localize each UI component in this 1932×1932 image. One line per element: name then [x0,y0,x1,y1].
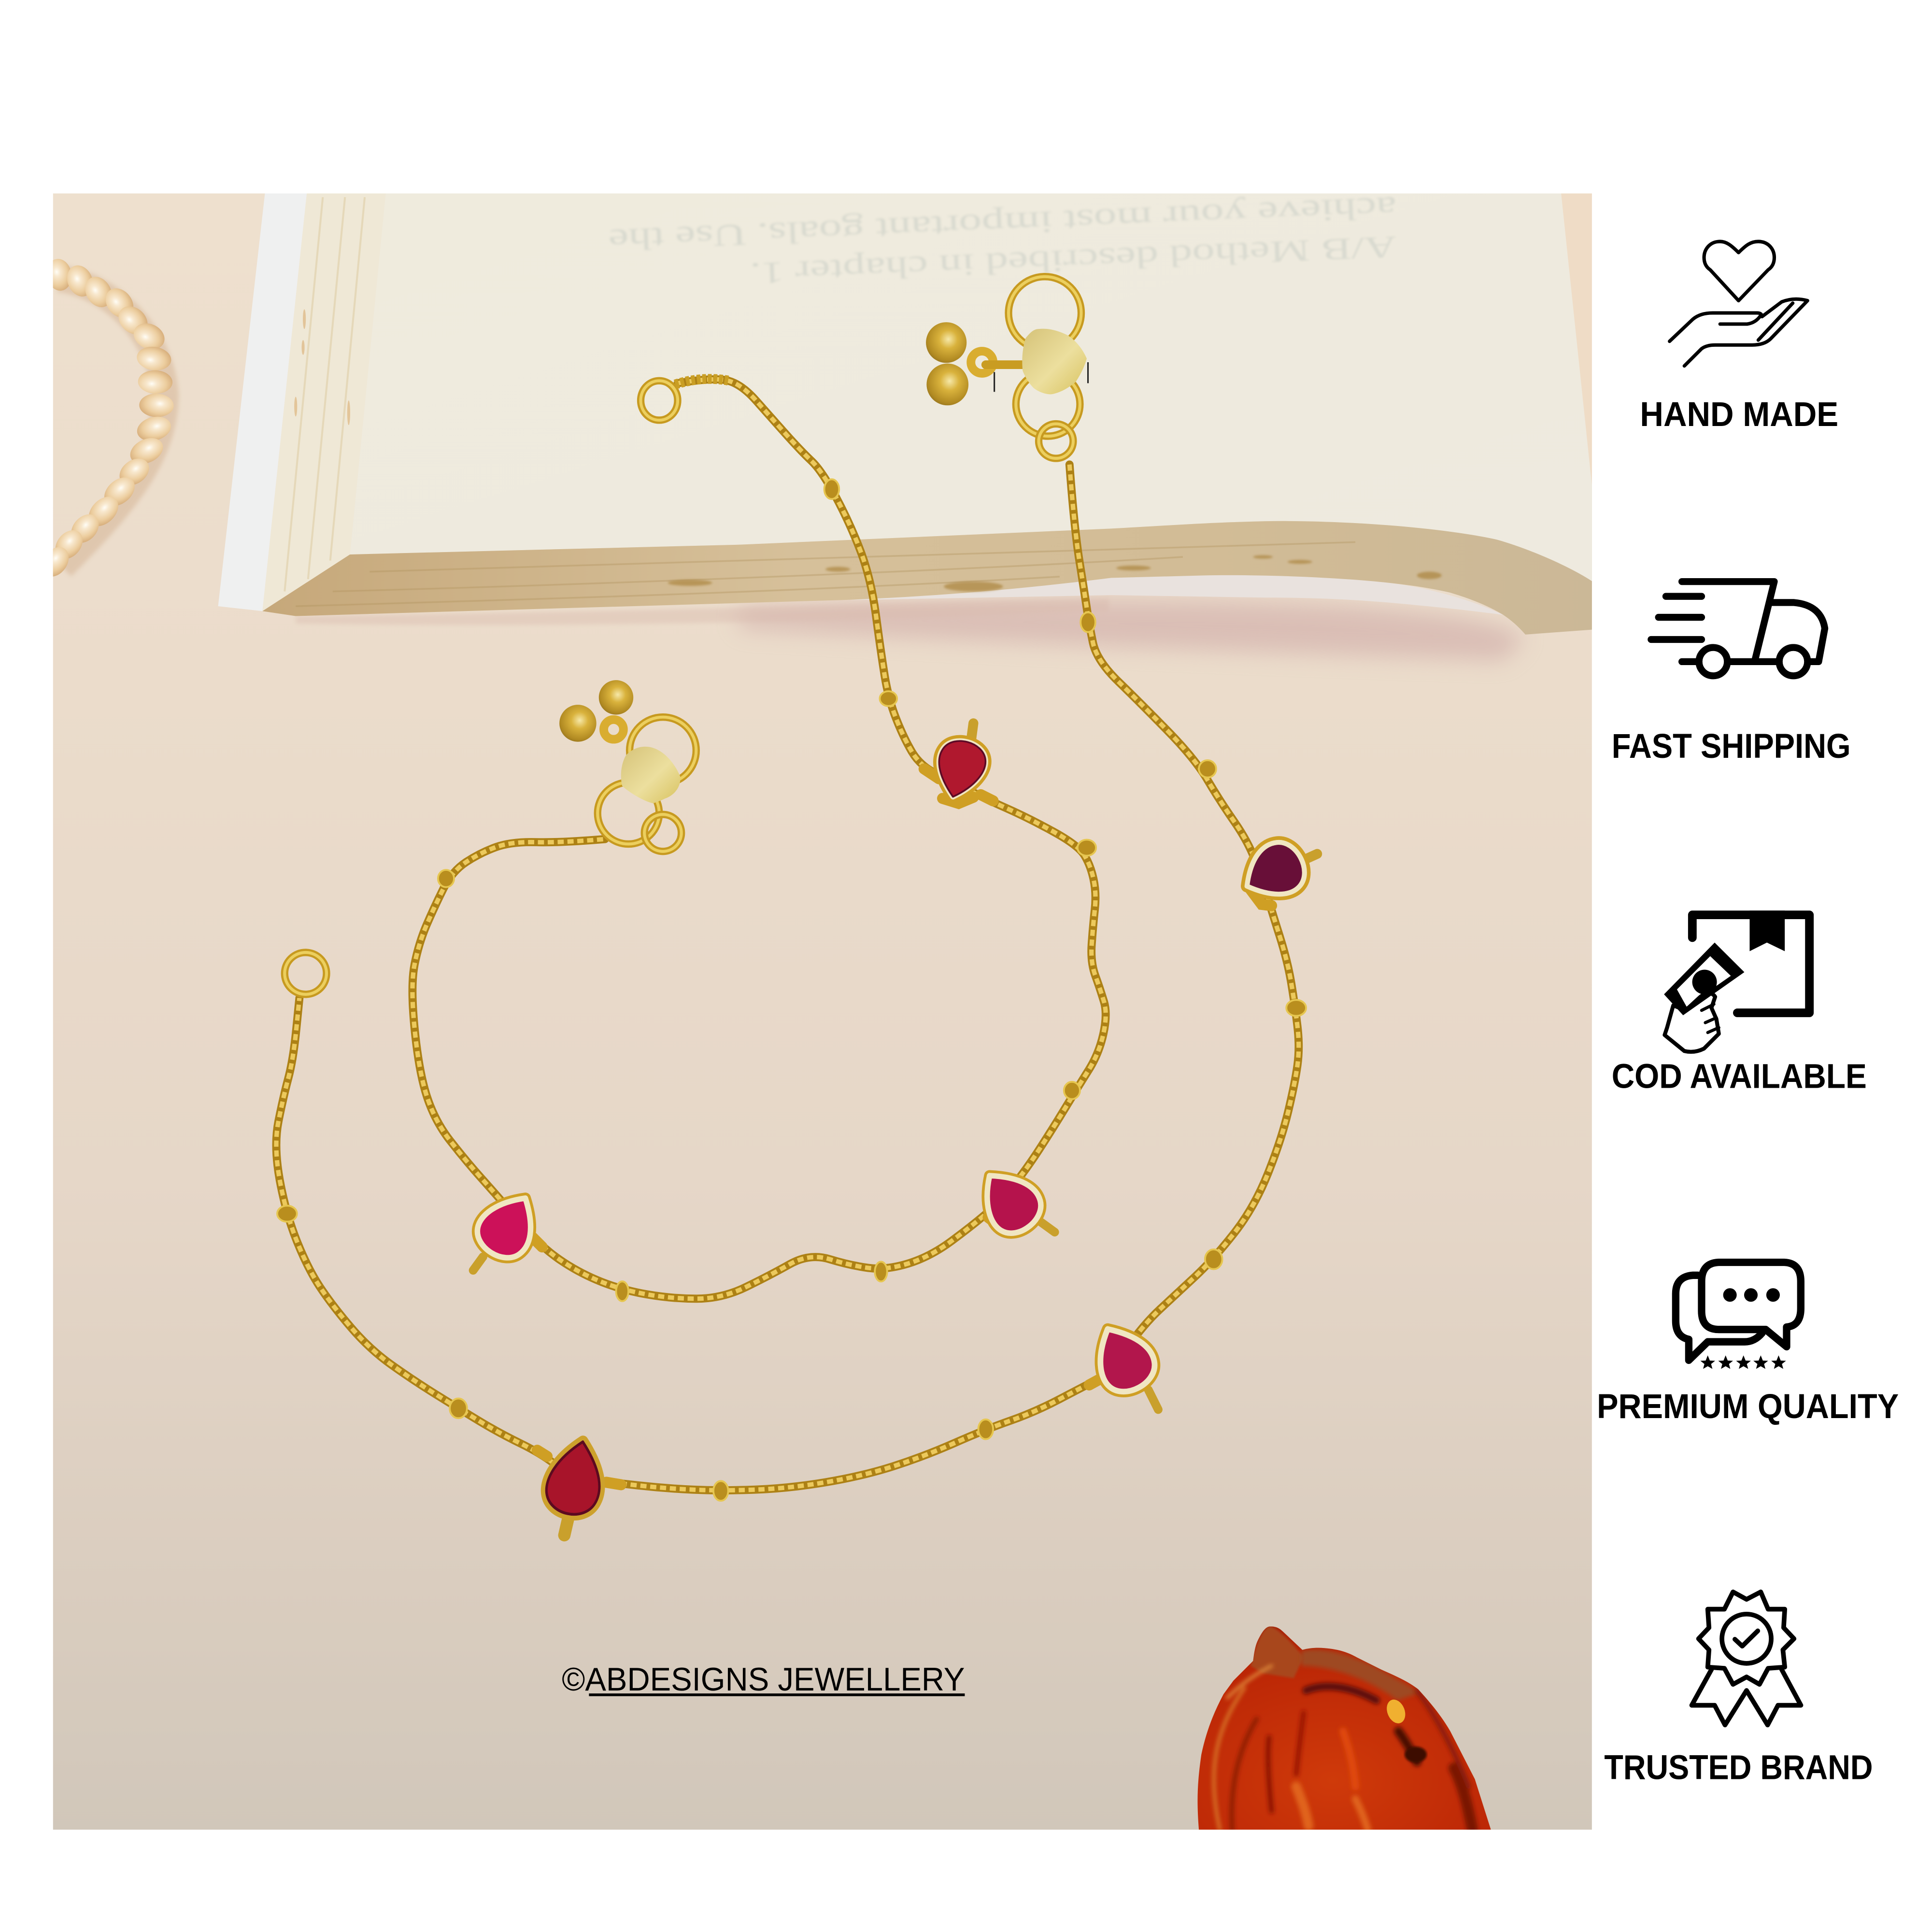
gem: red lower left [537,1436,621,1535]
gem: pink right [969,1159,1055,1242]
book shadow [739,601,1525,660]
chain end ring [641,379,729,420]
pearl bracelet [37,257,174,582]
chain inner [412,379,1106,1299]
icon: speeding truck [1651,582,1825,676]
icon: speech bubbles and stars [1676,1263,1801,1369]
pod yellow fleck [1383,1697,1408,1726]
faint mirrored page text [608,190,1397,291]
book cover edge [218,194,307,611]
book right cover strip [1555,194,1592,591]
clasp: upper [926,277,1088,458]
icon: parcel and cash [1664,910,1809,1052]
gem: dark plum [1235,835,1317,909]
label: FAST SHIPPING [1612,727,1851,766]
feature: trusted brand [1604,1592,1873,1787]
label: HAND MADE [1640,395,1838,434]
faint mirrored page text: A/B Method described in chapter 1. [750,230,1397,291]
anklet: outer chain [276,465,1306,1501]
page block stains [668,555,1442,591]
pearl shadow [59,279,165,567]
chain end ring [284,952,327,994]
label: PREMIUM QUALITY [1597,1387,1899,1426]
icon: heart in hand [1670,242,1807,366]
open book [218,190,1594,660]
red seed pod [1183,1614,1516,1836]
icon: award rosette [1692,1592,1801,1725]
photo background surface [53,194,1592,1830]
pod horn [1250,1626,1304,1678]
panel: product photo [37,190,1594,1836]
chain beads [438,479,1096,1301]
pod dark spot [1405,1747,1427,1762]
page block side [262,194,385,611]
feature: fast shipping [1612,582,1851,766]
white sliver under page curve [850,575,1503,615]
open page [350,194,1592,583]
clasp: lower [559,680,696,852]
gem: magenta left [469,1184,548,1270]
anklet: inner chain [412,379,1106,1301]
copyright watermark: ©ABDESIGNS JEWELLERY [562,1662,965,1698]
gem: crimson lower right [1084,1316,1163,1409]
pod shoulder [1301,1649,1420,1700]
feature: premium quality [1597,1263,1899,1426]
chain beads [277,612,1306,1501]
label: COD AVAILABLE [1612,1057,1867,1096]
feature: cash on delivery [1612,910,1867,1096]
feature: hand made [1640,242,1838,434]
label: TRUSTED BRAND [1604,1748,1873,1787]
gem: top red [924,723,993,803]
faint mirrored page text: achieve your most important goals. Use the [608,190,1397,257]
chain outer [276,465,1299,1490]
page block thickness [262,521,1594,635]
